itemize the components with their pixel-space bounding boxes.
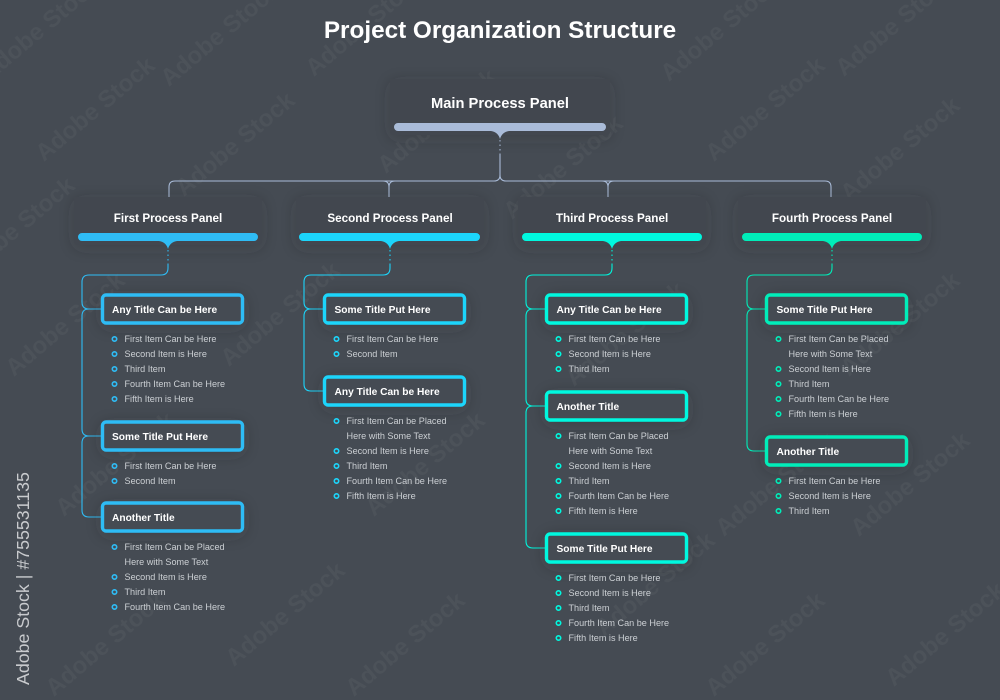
card: any title, second column: Any Title Can be Here	[334, 387, 440, 398]
text: Adobe Stock	[30, 51, 161, 167]
item list: Third Item	[124, 364, 165, 374]
text: Adobe Stock	[360, 406, 491, 522]
card: some title, third column	[546, 534, 686, 643]
panel: third process	[518, 197, 706, 249]
card: another title, first column	[102, 503, 242, 612]
item list: Third Item	[124, 587, 165, 597]
item list: Second Item	[346, 349, 398, 359]
item list	[112, 461, 216, 486]
text: Adobe Stock	[560, 276, 691, 392]
item list: Second Item	[124, 476, 176, 486]
item list: Fifth Item is Here	[788, 409, 858, 419]
item list: Fifth Item is Here	[124, 394, 194, 404]
item list: Third Item	[788, 379, 829, 389]
item list: Fourth Item Can be Here	[568, 491, 669, 501]
item list	[112, 542, 225, 612]
panel: fourth process	[738, 197, 926, 249]
item list: Second Item is Here	[568, 588, 651, 598]
item list: Third Item	[568, 364, 609, 374]
first panel heading: First Process Panel	[114, 212, 222, 225]
card: some title, second column	[324, 295, 464, 359]
text: Adobe Stock	[700, 51, 831, 167]
item list: Fifth Item is Here	[346, 491, 416, 501]
item list: Second Item is Here	[568, 461, 651, 471]
card: some title, third column: Some Title Put Here	[556, 544, 653, 555]
item list	[776, 476, 880, 516]
text: Adobe Stock	[835, 266, 966, 382]
title: Project Organization Structure	[324, 17, 676, 44]
card: any title, third column	[546, 295, 686, 374]
item list	[334, 416, 447, 501]
card: any title, first column: Any Title Can be Here	[112, 305, 217, 316]
item list: Third Item	[346, 461, 387, 471]
item list: Second Item is Here	[788, 364, 871, 374]
text: Adobe Stock	[220, 556, 351, 672]
item list: First Item Can be Here	[346, 334, 438, 344]
item list: Third Item	[568, 476, 609, 486]
third panel heading: Third Process Panel	[556, 212, 668, 225]
item list: Here with Some Text	[568, 446, 653, 456]
card: some title, second column: Some Title Put Here	[334, 305, 431, 316]
card: another title, third column: Another Title	[556, 402, 619, 413]
item list: Second Item is Here	[124, 572, 207, 582]
item list: Third Item	[788, 506, 829, 516]
card: any title, first column	[102, 295, 242, 404]
item list: First Item Can be Placed	[568, 431, 669, 441]
item list: Fourth Item Can be Here	[124, 379, 225, 389]
second panel heading: Second Process Panel	[327, 212, 453, 225]
item list	[556, 334, 660, 374]
text: Adobe Stock	[50, 406, 181, 522]
text: Adobe Stock	[700, 586, 831, 700]
text: Adobe Stock	[40, 586, 171, 700]
text: Adobe Stock	[835, 91, 966, 207]
text: Adobe Stock	[0, 266, 131, 382]
main panel bar	[394, 123, 606, 139]
item list: Fourth Item Can be Here	[124, 602, 225, 612]
connector: first column	[82, 250, 168, 517]
text: Adobe Stock	[215, 256, 346, 372]
item list: First Item Can be Here	[788, 476, 880, 486]
connector: main panel to process panels	[169, 140, 831, 197]
item list: Fourth Item Can be Here	[788, 394, 889, 404]
card: any title, second column	[324, 377, 464, 501]
second panel bar	[299, 233, 480, 249]
text: Adobe Stock	[498, 109, 629, 225]
item list: Second Item is Here	[346, 446, 429, 456]
panel: second process	[296, 197, 484, 249]
card: some title, fourth column: Some Title Put Here	[776, 305, 873, 316]
card: another title, third column	[546, 392, 686, 516]
item list	[776, 334, 889, 419]
item list: First Item Can be Here	[124, 461, 216, 471]
connector: third column	[526, 250, 612, 548]
item list: Here with Some Text	[788, 349, 873, 359]
fourth panel heading: Fourth Process Panel	[772, 212, 892, 225]
item list: First Item Can be Here	[568, 334, 660, 344]
item list	[334, 334, 438, 359]
card: another title, first column: Another Title	[112, 513, 175, 524]
card: another title, fourth column: Another Title	[776, 447, 839, 458]
item list: First Item Can be Placed	[346, 416, 447, 426]
first panel bar	[78, 233, 258, 249]
item list: Fourth Item Can be Here	[346, 476, 447, 486]
text: Adobe Stock	[372, 63, 503, 179]
item list: First Item Can be Placed	[788, 334, 889, 344]
item list: Third Item	[568, 603, 609, 613]
card: some title, first column: Some Title Put Here	[112, 432, 208, 443]
connector: fourth column	[747, 250, 832, 451]
panel: main process	[390, 79, 610, 139]
text: Adobe Stock	[340, 586, 471, 700]
third panel bar	[522, 233, 702, 249]
item list: Fifth Item is Here	[568, 506, 638, 516]
main panel heading: Main Process Panel	[431, 96, 569, 112]
card: some title, fourth column	[766, 295, 906, 419]
item list: Second Item is Here	[788, 491, 871, 501]
text: Adobe Stock	[845, 426, 976, 542]
item list: First Item Can be Here	[568, 573, 660, 583]
card: another title, fourth column	[766, 437, 906, 516]
stock credit text: Adobe Stock | #755531135	[13, 472, 33, 685]
connector: second column	[304, 250, 390, 391]
item list: First Item Can be Placed	[124, 542, 225, 552]
item list: Fourth Item Can be Here	[568, 618, 669, 628]
text: Adobe Stock	[710, 426, 841, 542]
text: Adobe Stock	[590, 526, 721, 642]
fourth panel bar	[742, 233, 922, 249]
item list: Here with Some Text	[124, 557, 209, 567]
item list: First Item Can be Here	[124, 334, 216, 344]
item list: Fifth Item is Here	[568, 633, 638, 643]
item list	[556, 573, 669, 643]
item list	[112, 334, 225, 404]
item list	[556, 431, 669, 516]
item list: Second Item is Here	[568, 349, 651, 359]
card: some title, first column	[102, 422, 242, 486]
item list: Second Item is Here	[124, 349, 207, 359]
panel: first process	[74, 197, 262, 249]
text: Adobe Stock	[170, 86, 301, 202]
item list: Here with Some Text	[346, 431, 431, 441]
card: any title, third column: Any Title Can be Here	[556, 305, 662, 316]
